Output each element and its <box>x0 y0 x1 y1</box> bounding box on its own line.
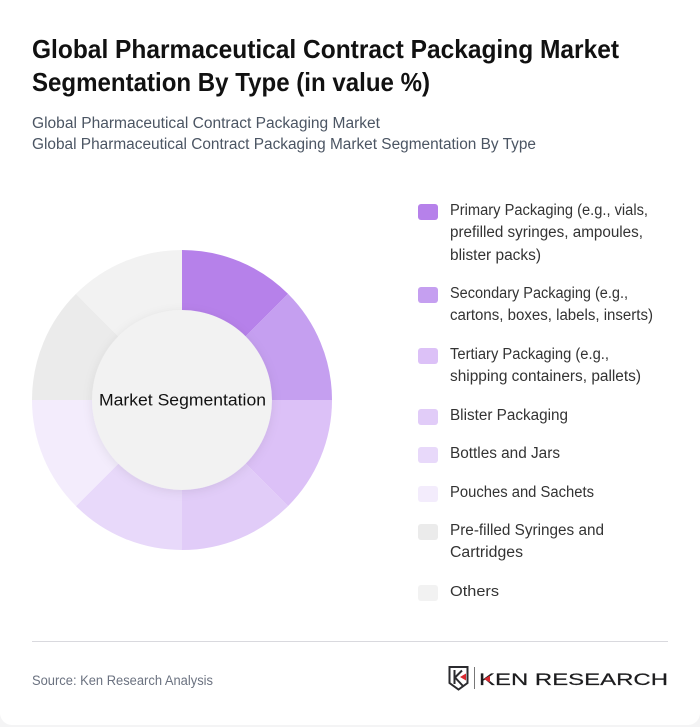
legend item: Pouches and Sachets: Pouches and Sachets <box>450 484 594 501</box>
source note: Source: Ken Research Analysis <box>32 673 213 688</box>
segment: Primary Packaging <box>182 250 288 400</box>
donut centre label: Market Segmentation <box>99 390 266 410</box>
legend item: Tertiary Packaging: shipping containers, pallets) <box>450 368 641 385</box>
donut centre <box>92 310 272 490</box>
subtitle: Global Pharmaceutical Contract Packaging Market <box>32 115 381 132</box>
title <box>32 34 619 97</box>
segment: Secondary Packaging <box>182 294 332 400</box>
legend item: Tertiary Packaging: Tertiary Packaging (e.g., <box>450 346 609 363</box>
legend item: Others <box>418 583 499 601</box>
legend item: Blister Packaging: Blister Packaging <box>450 407 568 424</box>
legend item: Others: Others <box>450 583 499 600</box>
segment: Pouches and Sachets <box>32 400 182 506</box>
segment: Tertiary Packaging <box>182 400 332 506</box>
segment: Bottles and Jars <box>76 400 182 550</box>
legend item: Tertiary Packaging <box>418 346 641 385</box>
icon: red wedge in wordmark <box>484 676 490 682</box>
legend item: Primary Packaging: blister packs) <box>450 247 541 264</box>
subtitle: Global Pharmaceutical Contract Packaging Market Segmentation By Type <box>32 136 536 153</box>
logo: Ken Research <box>450 667 668 690</box>
subtitle <box>32 115 536 153</box>
legend item: Pre-filled Syringes and Cartridges: Pre-filled Syringes and <box>450 522 604 539</box>
legend item: Pre-filled Syringes and Cartridges <box>418 522 604 561</box>
title: Segmentation By Type (in value %) <box>32 67 430 97</box>
title: Global Pharmaceutical Contract Packaging Market <box>32 34 619 64</box>
legend item: Primary Packaging <box>418 202 648 264</box>
legend item: Bottles and Jars: Bottles and Jars <box>450 445 560 462</box>
legend item: Primary Packaging: Primary Packaging (e.g., vials, <box>450 202 648 219</box>
legend item: Secondary Packaging: Secondary Packaging (e.g., <box>450 285 628 302</box>
logo wordmark: KEN RESEARCH <box>479 670 668 689</box>
legend item: Secondary Packaging <box>418 285 653 324</box>
segment: Blister Packaging <box>182 400 288 550</box>
legend item: Pre-filled Syringes and Cartridges: Cartridges <box>450 544 523 561</box>
segment: Pre-filled Syringes and Cartridges <box>32 294 182 400</box>
segment: Others <box>76 250 182 400</box>
donut chart <box>32 250 332 550</box>
legend item: Primary Packaging: prefilled syringes, ampoules, <box>450 224 643 241</box>
legend item: Secondary Packaging: cartons, boxes, labels, inserts) <box>450 307 653 324</box>
icon: shield <box>450 667 468 690</box>
legend <box>418 202 653 601</box>
